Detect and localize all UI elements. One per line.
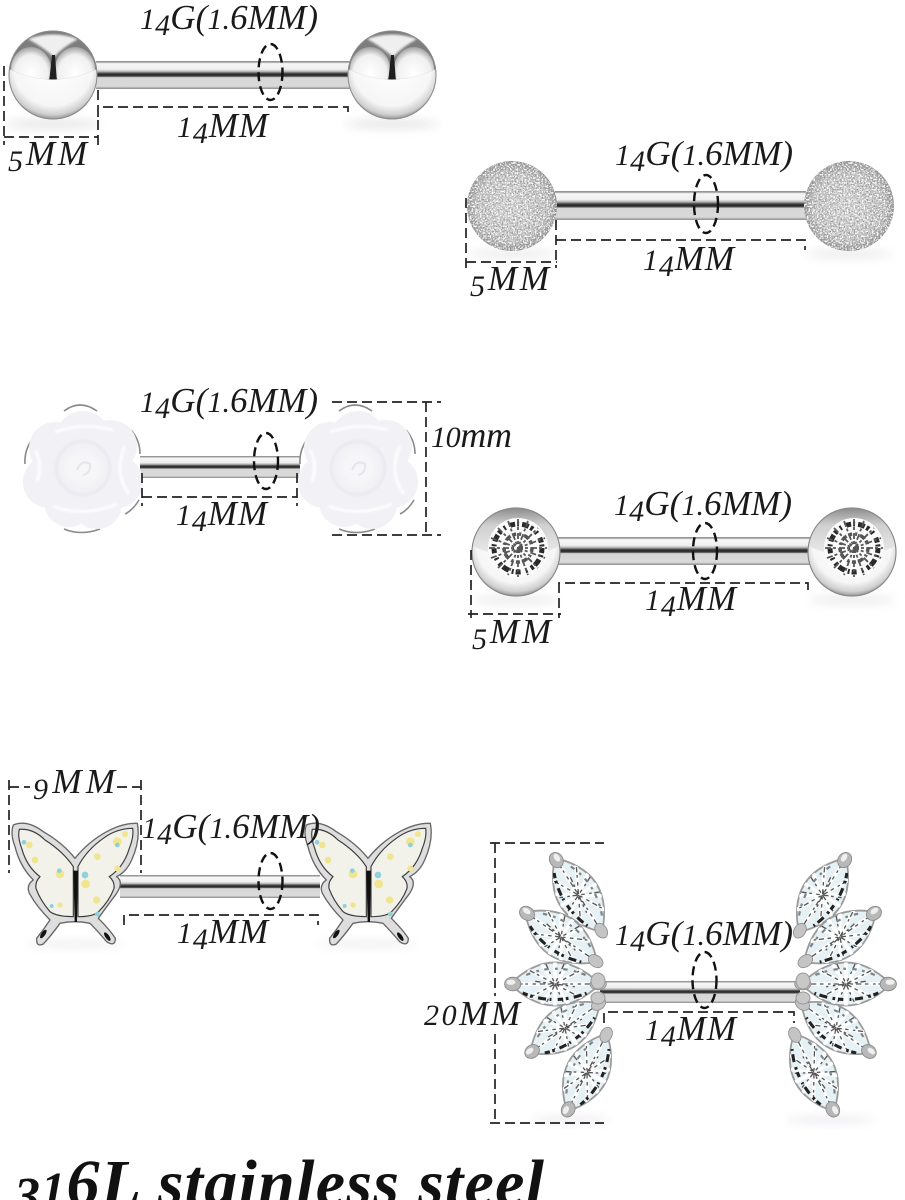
dimension lines 3 — [142, 402, 441, 535]
label: length 3: MM — [207, 494, 269, 533]
gauge ring 4 — [693, 523, 717, 579]
label: gauge 2: G( — [645, 134, 685, 173]
label: gauge 5: 4 — [157, 818, 172, 851]
label: length 5: 4 — [193, 923, 208, 956]
label: length 4: 4 — [661, 590, 676, 623]
piercing 6: marquise crystal wings barbell — [505, 842, 896, 1126]
label: gauge 2: 4 — [630, 145, 645, 178]
label: ball size 2: 5 — [470, 270, 485, 303]
dimension lines 6 — [490, 843, 794, 1123]
piercing 4: crystal ball barbell — [472, 508, 896, 603]
label: gauge 4: 1.6MM) — [681, 484, 792, 523]
piercing 2: frosted ball barbell — [467, 161, 894, 257]
label: gauge 6: G( — [645, 914, 685, 953]
label: gauge 5: G( — [172, 807, 212, 846]
piercing 1: polished ball barbell — [5, 30, 440, 128]
label: length 2: MM — [674, 239, 736, 278]
label: gauge 4: 1 — [614, 489, 629, 522]
label: gauge 4: G( — [644, 484, 684, 523]
label: ball size 1: 5 — [8, 145, 23, 178]
label: gauge 2: 1 — [615, 139, 630, 172]
piercing 5: butterfly barbell — [12, 823, 431, 946]
label: ball size 4: MM — [489, 612, 553, 651]
label: gauge 3: G( — [170, 381, 210, 420]
gauge ring 3 — [254, 433, 278, 489]
label: width 9mm: 9 — [33, 773, 48, 806]
label: rose size: 10mm — [431, 415, 512, 455]
label: length 5: MM — [208, 912, 270, 951]
label: gauge 4: 4 — [629, 495, 644, 528]
label: gauge 1: 1 — [140, 3, 155, 36]
label: gauge 5: 1.6MM) — [209, 807, 320, 846]
label: length 1: 1 — [177, 111, 192, 144]
gauge ring 5 — [258, 853, 282, 909]
label: length 2: 1 — [643, 244, 658, 277]
label: gauge 3: 1 — [140, 386, 155, 419]
label: gauge 3: 1.6MM) — [207, 381, 318, 420]
label: length 2: 4 — [659, 250, 674, 283]
label: length 6: 4 — [661, 1020, 676, 1053]
label: gauge 3: 4 — [155, 392, 170, 425]
gauge ring 2 — [694, 175, 718, 233]
label: length 5: 1 — [177, 917, 192, 950]
label: gauge 5: 1 — [142, 812, 157, 845]
label: length 1: 4 — [193, 117, 208, 150]
label: length 6: MM — [676, 1009, 738, 1048]
label: gauge 1: 4 — [155, 9, 170, 42]
label: ball size 1: MM — [25, 134, 89, 173]
label: length 3: 4 — [192, 505, 207, 538]
dimension lines 1 — [4, 66, 348, 145]
label: ball size 4: 5 — [472, 623, 487, 656]
dimension lines 4 — [468, 550, 808, 618]
label: height 20mm: 20MM — [424, 994, 522, 1033]
gauge ring 6 — [692, 952, 716, 1008]
label: length 3: 1 — [176, 499, 191, 532]
label: gauge 6: 4 — [630, 925, 645, 958]
label: ball size 2: MM — [487, 259, 551, 298]
label: gauge 6: 1 — [615, 919, 630, 952]
label: width 9mm: MM — [51, 762, 117, 801]
label: gauge 6: 1.6MM) — [682, 914, 793, 953]
dimension lines 5 — [9, 780, 318, 925]
label: length 4: 1 — [645, 584, 660, 617]
label: length 1: MM — [208, 106, 270, 145]
piercing 3: rose barbell — [23, 405, 418, 532]
label: gauge 2: 1.6MM) — [682, 134, 793, 173]
label: length 4: MM — [676, 579, 738, 618]
gauge ring 1 — [258, 44, 282, 100]
label: length 6: 1 — [645, 1014, 660, 1047]
dimension lines 2 — [466, 198, 805, 268]
